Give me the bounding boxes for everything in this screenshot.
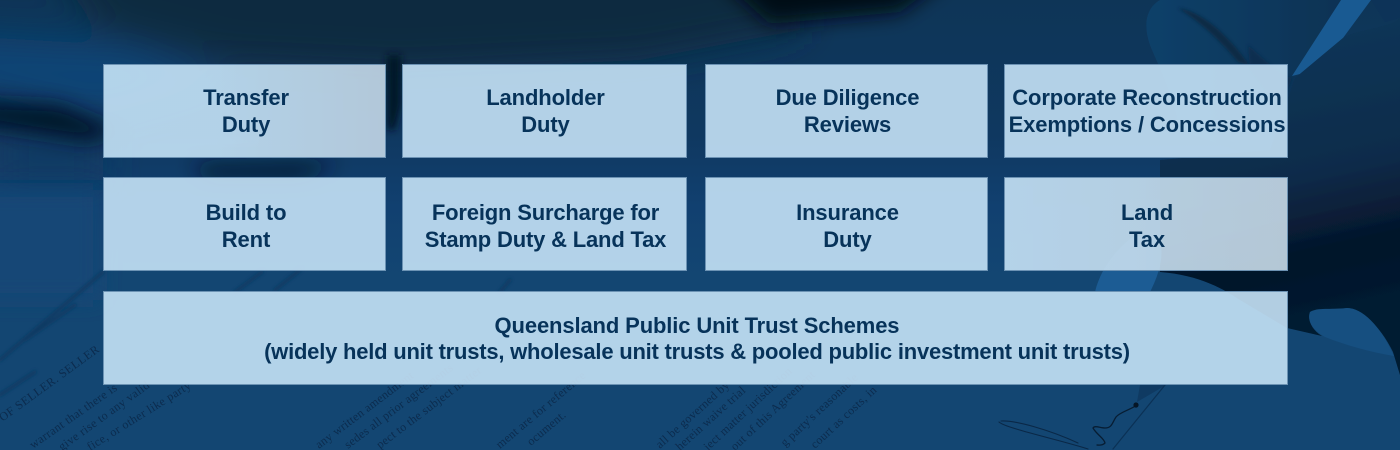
dark blurred shapes at the top: [0, 0, 800, 180]
card: Foreign Surcharge for Stamp Duty & Land Tax: Foreign Surcharge for: [432, 200, 659, 224]
blurred document lines: [0, 270, 510, 395]
card: Transfer Duty: Transfer: [203, 84, 289, 110]
contract fine print: [0, 342, 879, 450]
card: Insurance Duty: Insurance: [796, 200, 899, 224]
hand holding pen, top right: [1095, 0, 1400, 402]
card: Due Diligence Reviews: Reviews: [804, 112, 891, 136]
contract fine print: pect to the subject matter: [373, 363, 484, 450]
contract fine print: warrant that there is: [27, 380, 120, 450]
card: Corporate Reconstruction Exemptions / Concessions: Corporate Reconstruction: [1012, 84, 1282, 110]
card: Land Tax: Tax: [1129, 226, 1165, 252]
card: Build to Rent: Rent: [222, 226, 270, 252]
card: Insurance Duty: Duty: [823, 226, 872, 252]
card: Corporate Reconstruction Exemptions / Concessions: Exemptions / Concessions: [1009, 112, 1285, 136]
pen barrel: [1292, 0, 1371, 76]
card: Land Tax: [1004, 177, 1288, 271]
pen-side dark gap: [1371, 0, 1400, 22]
upper knuckle: [1146, 0, 1345, 170]
card: Due Diligence Reviews: Due Diligence: [776, 84, 919, 110]
contract fine print: court as costs, in: [807, 383, 879, 450]
contract fine print: ment are for reference: [493, 368, 588, 450]
card: Insurance Duty: [705, 177, 988, 271]
card: Build to Rent: Build to: [206, 200, 286, 224]
card: Landholder Duty: [402, 64, 687, 158]
card: Queensland Public Unit Trust Schemes: [103, 291, 1288, 385]
card: Due Diligence Reviews: [705, 64, 988, 158]
card: Landholder Duty: Duty: [521, 112, 570, 136]
card: Corporate Reconstruction Exemptions / Concessions: [1004, 64, 1288, 158]
card: Transfer Duty: Duty: [222, 112, 270, 136]
fist and dark finger: [1160, 18, 1400, 375]
signature: [999, 385, 1165, 449]
contract fine print: ocument.: [524, 408, 569, 448]
card: Transfer Duty: [103, 64, 386, 158]
card: Foreign Surcharge for Stamp Duty & Land Tax: Stamp Duty & Land Tax: [425, 226, 666, 252]
fingernail: [1309, 308, 1394, 356]
card: Build to Rent: [103, 177, 386, 271]
contract fine print: all be governed by: [653, 378, 732, 450]
contract fine print: sedes all prior agreements: [341, 360, 456, 450]
contract fine print: g party's reasonable: [777, 370, 861, 449]
card: Foreign Surcharge for Stamp Duty & Land Tax: [402, 177, 687, 271]
card: Queensland Public Unit Trust Schemes: (widely held unit trusts, wholesale unit trusts & pooled public investment unit trusts): [264, 339, 1130, 364]
card: Landholder Duty: Landholder: [486, 84, 605, 110]
card: Land Tax: Land: [1121, 200, 1173, 224]
light index finger: [1095, 235, 1161, 292]
card: Queensland Public Unit Trust Schemes: Queensland Public Unit Trust Schemes: [495, 313, 899, 338]
contract fine print: any written amendment: [312, 368, 417, 450]
pen nib: [1137, 385, 1166, 402]
